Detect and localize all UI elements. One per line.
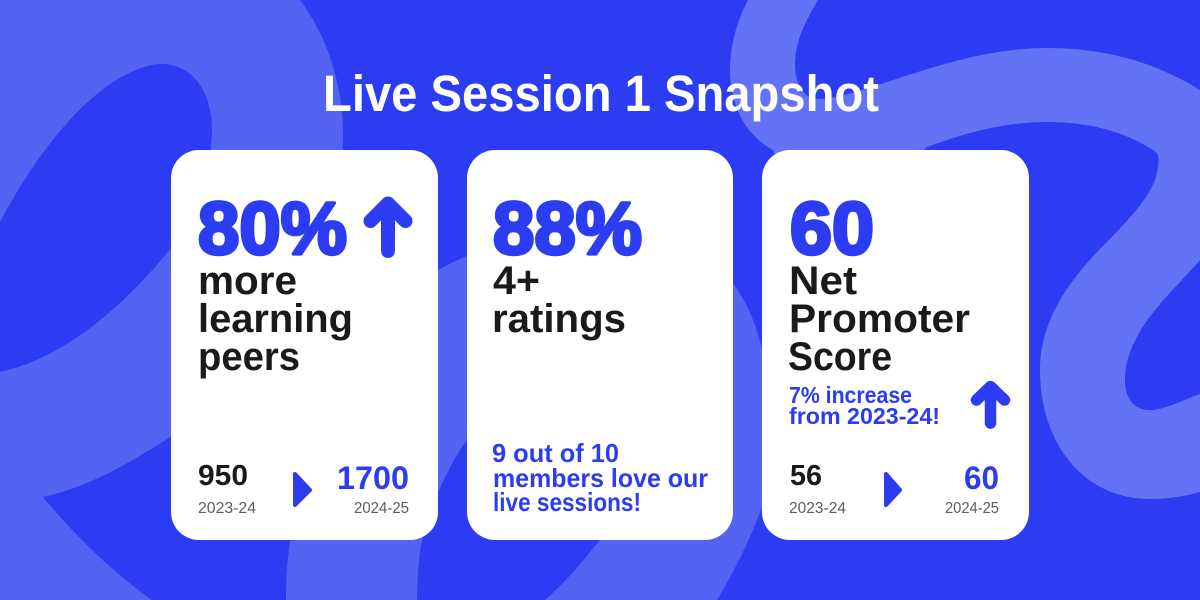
title: Live Session 1 Snapshot	[323, 65, 879, 122]
label: more learning peers: more	[198, 259, 297, 303]
callout: 9 out of 10 members: 9 out of 10	[492, 438, 619, 468]
icon: up arrow	[976, 386, 1004, 423]
comparison: 1700 in 2024-25: 1700	[337, 460, 409, 496]
callout: 9 out of 10 members	[492, 438, 708, 517]
comparison: 950 in 2023-24: 950	[198, 460, 248, 492]
comparison: 56 in 2023-24	[789, 460, 846, 517]
stat: 80%: 80%	[198, 187, 347, 270]
callout: 7% increase: 7% increase	[789, 382, 912, 408]
panel: 4+ ratings	[467, 150, 733, 540]
icon: right arrow	[295, 474, 310, 505]
comparison: 1700 in 2024-25	[337, 460, 409, 517]
background swirl: right	[730, 0, 1200, 499]
comparison: 60 in 2024-25: 2024-25	[945, 500, 999, 517]
stat: 60: 60	[790, 187, 874, 270]
callout: 7% increase: from 2023-24!	[789, 403, 940, 429]
icon: right arrow	[886, 474, 900, 505]
label: more learning peers	[198, 259, 353, 379]
label: Net Promoter Score: Score	[788, 335, 892, 379]
label: 4+ ratings: 4+	[493, 259, 540, 303]
comparison: 950 in 2023-24	[198, 460, 256, 517]
label: Net Promoter Score: Promoter	[789, 297, 970, 341]
stat: 88%: 88%	[493, 187, 642, 270]
icon: up arrow	[370, 204, 406, 251]
comparison: 60 in 2024-25: 60	[964, 460, 999, 496]
panel: Net Promoter Score	[762, 150, 1029, 540]
label: more learning peers: peers	[198, 335, 300, 379]
label: Net Promoter Score	[788, 259, 970, 379]
comparison: 56 in 2023-24: 2023-24	[789, 500, 846, 517]
panel: more learning peers	[171, 150, 438, 540]
callout: 9 out of 10 members: members love our	[493, 463, 708, 493]
callout: 9 out of 10 members: live sessions!	[493, 487, 641, 517]
label: 4+ ratings: ratings	[492, 297, 626, 341]
background dark wedge: lower left	[43, 350, 300, 600]
comparison: 60 in 2024-25	[945, 460, 999, 517]
label: more learning peers: learning	[198, 297, 353, 341]
comparison: 56 in 2023-24: 56	[790, 460, 822, 492]
label: Net Promoter Score: Net	[789, 259, 857, 303]
label: 4+ ratings	[492, 259, 626, 341]
background swirl: left	[0, 0, 768, 600]
comparison: 1700 in 2024-25: 2024-25	[354, 500, 409, 517]
comparison: 950 in 2023-24: 2023-24	[198, 500, 256, 517]
callout: 7% increase	[789, 382, 940, 429]
